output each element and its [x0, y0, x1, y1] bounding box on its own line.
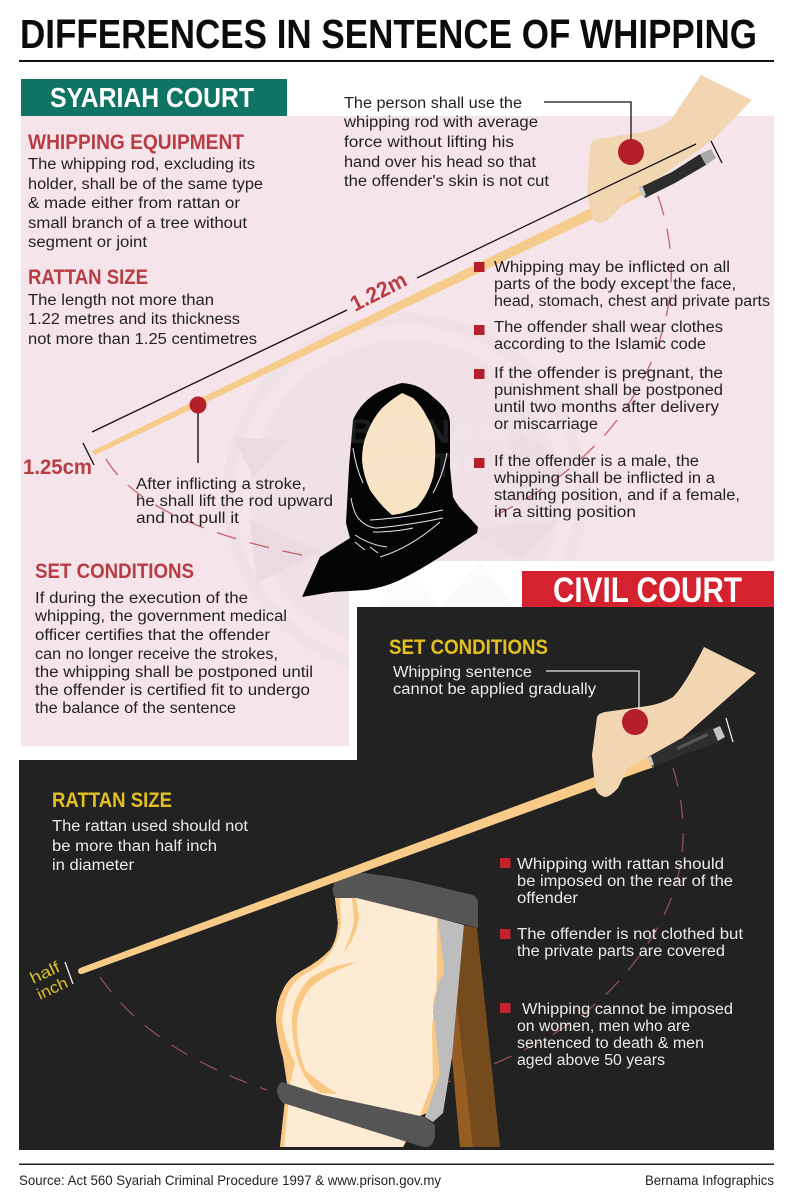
- bullet: rear: Whipping with rattan should: [517, 856, 724, 873]
- text block: set conditions syariah: If during the execution of the: [35, 590, 248, 607]
- callout dot: average force: [544, 102, 644, 165]
- callout dot: civil hand: [546, 671, 648, 735]
- text block: rattan size civil: be more than half inch: [52, 838, 217, 855]
- swing arc: civil: [100, 768, 683, 1090]
- bullet: clothes: [474, 319, 723, 353]
- text block: rattan size syariah: 1.22 metres and its thickness: [28, 311, 240, 328]
- text block: set conditions syariah: [34, 560, 313, 717]
- text block: after inflicting: he shall lift the rod upward: [136, 493, 333, 510]
- measure line: rod length: [83, 141, 722, 465]
- bullet: exemptions: aged above 50 years: [517, 1052, 665, 1069]
- icon: offender body on frame: [276, 873, 500, 1147]
- watermark: [233, 422, 574, 583]
- hand: civil: [592, 647, 756, 797]
- title rule: [19, 60, 774, 62]
- callout: average force: force without lifting his: [344, 134, 514, 151]
- cloth: [425, 918, 464, 1122]
- source: Source: Act 560 Syariah Criminal Procedure 1997 & www.prison.gov.my: [19, 1172, 441, 1188]
- body shading: crease: [292, 962, 358, 1094]
- text block: rattan size civil: The rattan used should not: [52, 818, 249, 835]
- callout: average force: the offender's skin is not cut: [344, 173, 550, 190]
- panel: syariah background: [21, 116, 774, 746]
- text block: rattan size civil: in diameter: [52, 857, 134, 874]
- heading: syariah court: SYARIAH COURT: [50, 82, 254, 113]
- bullet: body parts: head, stomach, chest and private parts: [494, 293, 770, 310]
- frame legs: [452, 925, 500, 1147]
- panel: civil background: [19, 607, 774, 1150]
- bullet: pregnancy: or miscarriage: [494, 416, 598, 433]
- text block: rattan size syariah: not more than 1.25 centimetres: [28, 331, 257, 348]
- label: half inch: [28, 959, 73, 1004]
- callout: average force: The person shall use the: [344, 95, 522, 112]
- text block: set conditions syariah: whipping, the government medical: [34, 608, 287, 625]
- bullet: position: in a sitting position: [494, 504, 636, 521]
- text block: set conditions civil: SET CONDITIONS: [389, 636, 548, 659]
- bullet: body parts: Whipping may be inflicted on all: [494, 259, 730, 276]
- body shading: waist: [343, 898, 359, 953]
- top strap: [333, 873, 478, 928]
- text block: set conditions syariah: officer certifies that the offender: [35, 627, 270, 644]
- bullet: position: If the offender is a male, the: [494, 453, 699, 470]
- body shading: front: [420, 918, 444, 1116]
- bullet: clothes: according to the Islamic code: [494, 336, 706, 353]
- text block: rattan size syariah: RATTAN SIZE: [28, 266, 148, 289]
- watermark lettering: [348, 413, 533, 485]
- bullet: position: standing position, and if a female,: [494, 487, 740, 504]
- text block: set conditions syariah: the balance of the sentence: [35, 700, 236, 717]
- credit: Bernama Infographics: [645, 1172, 774, 1188]
- callout: average force: hand over his head so that: [344, 154, 537, 171]
- bullet: rear: be imposed on the rear of the: [517, 873, 733, 890]
- text block: set conditions syariah: can no longer receive the strokes,: [35, 646, 278, 663]
- bullet: position: whipping shall be inflicted in a: [493, 470, 715, 487]
- icon: woman in hijab: [302, 383, 478, 597]
- bullet: not clothed: the private parts are covered: [517, 943, 725, 960]
- text block: after inflicting: and not pull it: [136, 510, 240, 527]
- bullet: exemptions: on women, men who are: [517, 1018, 690, 1035]
- bullet: pregnancy: punishment shall be postponed: [494, 382, 723, 399]
- text block: whipping equipment: holder, shall be of the same type: [28, 176, 263, 193]
- text block: whipping equipment: small branch of a tree without: [28, 215, 248, 232]
- bullet: not clothed: The offender is not clothed but: [517, 926, 744, 943]
- watermark lettering: BERNAMA: [348, 413, 533, 451]
- text block: rattan size civil: [52, 789, 249, 874]
- bullet: body parts: [474, 259, 770, 310]
- bullet: pregnancy: [474, 365, 723, 433]
- text block: set conditions syariah: SET CONDITIONS: [35, 560, 194, 583]
- callout: average force: [343, 95, 550, 190]
- bullet list: syariah rules: [474, 259, 770, 521]
- callout dot: lift rod: [190, 396, 206, 463]
- rod handle: syariah: [638, 149, 716, 198]
- text block: whipping equipment: [28, 131, 263, 251]
- text block: set conditions civil: Whipping sentence: [393, 664, 532, 681]
- bullet: pregnancy: If the offender is pregnant, the: [494, 365, 723, 382]
- bottom strap: [277, 1082, 435, 1147]
- label: half inch: inch: [35, 975, 71, 1004]
- text block: rattan size syariah: [28, 266, 257, 348]
- callout: average force: whipping rod with average: [343, 114, 538, 131]
- bullet: exemptions: Whipping cannot be imposed: [522, 1001, 733, 1018]
- label: 1.25cm: 1.25cm: [23, 456, 92, 479]
- rod handle: civil: [648, 718, 733, 767]
- text block: rattan size syariah: The length not more than: [28, 292, 214, 309]
- text block: whipping equipment: WHIPPING EQUIPMENT: [28, 131, 244, 154]
- text block: whipping equipment: & made either from rattan or: [28, 195, 240, 212]
- bullet: pregnancy: until two months after delivery: [494, 399, 719, 416]
- text block: whipping equipment: segment or joint: [28, 234, 148, 251]
- bullet: exemptions: sentenced to death & men: [517, 1035, 704, 1052]
- swing arc: syariah: [106, 196, 671, 557]
- text block: after inflicting: After inflicting a stroke,: [136, 476, 306, 493]
- rattan rod: civil: [78, 756, 654, 974]
- hand: syariah: [587, 75, 752, 223]
- text block: set conditions syariah: the whipping shall be postponed until: [35, 664, 313, 681]
- rattan rod: syariah: [92, 185, 643, 455]
- text block: rattan size civil: RATTAN SIZE: [52, 789, 172, 812]
- bullet: rear: [500, 856, 733, 907]
- text block: set conditions syariah: the offender is certified fit to undergo: [35, 682, 310, 699]
- bullet list: civil rules: [500, 856, 744, 1069]
- buttocks: [276, 898, 443, 1147]
- bullet: exemptions: [500, 1001, 733, 1069]
- body shading: back outline: [276, 898, 341, 1147]
- text block: set conditions civil: [389, 636, 596, 698]
- label: 1.22m: 1.22m: [346, 267, 411, 316]
- bullet: clothes: The offender shall wear clothes: [494, 319, 723, 336]
- footer rule: [19, 1164, 774, 1165]
- label: half inch: half: [28, 959, 63, 988]
- text block: whipping equipment: The whipping rod, excluding its: [28, 156, 255, 173]
- bullet: rear: offender: [517, 890, 578, 907]
- bullet: position: [474, 453, 740, 521]
- heading: civil court: CIVIL COURT: [553, 571, 742, 610]
- text block: set conditions civil: cannot be applied gradually: [393, 681, 596, 698]
- bullet: body parts: parts of the body except the face,: [494, 276, 736, 293]
- bullet: not clothed: [500, 926, 744, 960]
- text block: after inflicting: [136, 476, 333, 527]
- watermark lettering: MULTIM: [363, 447, 490, 485]
